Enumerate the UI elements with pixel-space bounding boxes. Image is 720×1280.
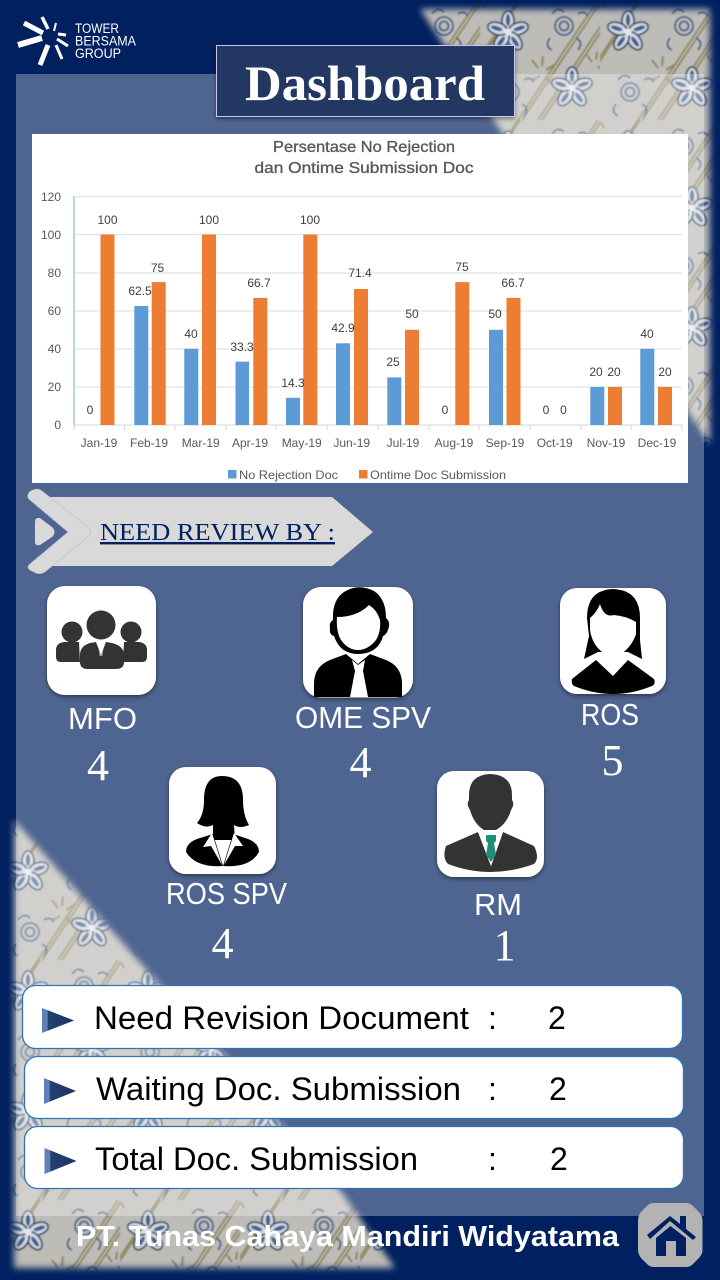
bar chart: Persentase No Rejection dan Ontime Submission Doc: 20 xyxy=(607,365,621,379)
bar chart: Persentase No Rejection dan Ontime Submission Doc: Apr-19 xyxy=(232,436,268,450)
bar chart: Persentase No Rejection dan Ontime Submission Doc: 20 xyxy=(48,380,61,394)
label: RM: RM xyxy=(474,887,522,922)
bar chart: Persentase No Rejection dan Ontime Submission Doc: 62.5 xyxy=(128,284,152,298)
bar chart: Persentase No Rejection dan Ontime Submission Doc: 0 xyxy=(560,403,567,417)
bar chart: Persentase No Rejection dan Ontime Submission Doc: 40 xyxy=(48,342,61,356)
bar chart: Persentase No Rejection dan Ontime Submission Doc: 60 xyxy=(48,304,61,318)
bar chart: Persentase No Rejection dan Ontime Submission Doc: Dec-19 xyxy=(638,436,677,450)
bar chart: Persentase No Rejection dan Ontime Submission Doc: 100 xyxy=(199,213,219,227)
icon card: ROS xyxy=(560,588,666,694)
label: ROS SPV: ROS SPV xyxy=(166,876,287,911)
icon card: OME SPV xyxy=(303,587,413,698)
row: total doc submission xyxy=(24,1126,684,1188)
bar chart: Persentase No Rejection dan Ontime Submission Doc: Ontime Doc Submission xyxy=(370,468,506,482)
count: ROS SPV: 4 xyxy=(212,919,234,968)
row: total doc submission: 2 xyxy=(550,1141,568,1177)
label: MFO: MFO xyxy=(68,701,137,736)
bar chart: Persentase No Rejection dan Ontime Submission Doc: Nov-19 xyxy=(587,436,626,450)
bar chart: Persentase No Rejection dan Ontime Submission Doc: 33.3 xyxy=(230,340,254,354)
row: waiting doc submission: : xyxy=(488,1071,497,1107)
footer: company name: PT. Tunas Cahaya Mandiri Widyatama xyxy=(76,1221,620,1253)
bar chart: Persentase No Rejection dan Ontime Submission Doc: 66.7 xyxy=(247,276,271,290)
count: ROS: 5 xyxy=(602,736,624,785)
bar chart: Persentase No Rejection dan Ontime Submission Doc: Mar-19 xyxy=(182,436,220,450)
bar chart: Persentase No Rejection dan Ontime Submission Doc: Jan-19 xyxy=(81,436,118,450)
bar chart: Persentase No Rejection dan Ontime Submission Doc: 71.4 xyxy=(348,266,372,280)
label: ROS: ROS xyxy=(581,697,639,732)
icon: home button xyxy=(638,1203,702,1267)
bar chart: Persentase No Rejection dan Ontime Submission Doc: 42.9 xyxy=(331,321,355,335)
bar chart: Persentase No Rejection dan Ontime Submission Doc: Feb-19 xyxy=(130,436,168,450)
bar chart: Persentase No Rejection dan Ontime Submission Doc: Jul-19 xyxy=(387,436,420,450)
row: waiting doc submission: 2 xyxy=(549,1071,567,1107)
count: MFO: 4 xyxy=(87,741,109,790)
row: need revision document: 2 xyxy=(548,1000,566,1036)
bar chart: Persentase No Rejection dan Ontime Submission Doc: 0 xyxy=(54,418,61,432)
label: OME SPV: OME SPV xyxy=(295,700,431,735)
bar chart: Persentase No Rejection dan Ontime Submission Doc: 20 xyxy=(658,365,672,379)
title: Dashboard: Dashboard xyxy=(245,55,485,111)
bar chart: Persentase No Rejection dan Ontime Submission Doc: 0 xyxy=(543,403,550,417)
bar chart: Persentase No Rejection dan Ontime Submission Doc: 75 xyxy=(455,260,469,274)
bar chart: Persentase No Rejection dan Ontime Submission Doc: 25 xyxy=(386,355,400,369)
bar chart: Persentase No Rejection dan Ontime Submission Doc: No Rejection Doc xyxy=(239,468,338,482)
bar chart: Persentase No Rejection dan Ontime Submission Doc: 100 xyxy=(300,213,320,227)
logo: Tower Bersama Group: GROUP xyxy=(75,46,121,61)
bar chart: Persentase No Rejection dan Ontime Submission Doc: 100 xyxy=(97,213,118,227)
bar chart: Persentase No Rejection dan Ontime Submission Doc: 40 xyxy=(640,327,654,341)
count: RM: 1 xyxy=(494,921,516,970)
bar chart: Persentase No Rejection dan Ontime Submission Doc: 80 xyxy=(48,266,61,280)
bar chart: Persentase No Rejection dan Ontime Submission Doc: 75 xyxy=(151,261,164,275)
ribbon: need review by: NEED REVIEW BY : xyxy=(100,520,335,546)
row: need revision document: : xyxy=(488,1000,497,1036)
row: need revision document: Need Revision Document xyxy=(94,1000,469,1036)
row: waiting doc submission xyxy=(24,1056,684,1118)
bar chart: Persentase No Rejection dan Ontime Submission Doc: 0 xyxy=(87,403,94,417)
row: need revision document xyxy=(22,986,682,1048)
bar chart: Persentase No Rejection dan Ontime Submission Doc: Aug-19 xyxy=(435,436,474,450)
bar chart: Persentase No Rejection dan Ontime Submission Doc xyxy=(32,134,688,483)
row: total doc submission: Total Doc. Submission xyxy=(95,1141,418,1177)
bar chart: Persentase No Rejection dan Ontime Submission Doc: 14.3 xyxy=(281,376,305,390)
title: Dashboard xyxy=(216,46,514,116)
bar chart: Persentase No Rejection dan Ontime Submission Doc: Oct-19 xyxy=(537,436,573,450)
icon card: ROS SPV xyxy=(169,767,276,874)
bar chart: Persentase No Rejection dan Ontime Submission Doc: May-19 xyxy=(282,436,322,450)
row: total doc submission: : xyxy=(488,1141,497,1177)
bar chart: Persentase No Rejection dan Ontime Submission Doc: Jun-19 xyxy=(333,436,370,450)
bar chart: Persentase No Rejection dan Ontime Submission Doc: 66.7 xyxy=(501,276,525,290)
logo: Tower Bersama Group: BERSAMA xyxy=(75,34,136,48)
bar chart: Persentase No Rejection dan Ontime Submission Doc: 40 xyxy=(184,327,198,341)
bar chart: Persentase No Rejection dan Ontime Submission Doc: Persentase No Rejection xyxy=(273,139,455,156)
bar chart: Persentase No Rejection dan Ontime Submission Doc: 100 xyxy=(41,228,61,242)
row: waiting doc submission: Waiting Doc. Submission xyxy=(96,1071,461,1107)
bar chart: Persentase No Rejection dan Ontime Submission Doc: 20 xyxy=(589,365,603,379)
logo: Tower Bersama Group: TOWER xyxy=(75,21,119,36)
logo: Tower Bersama Group xyxy=(18,17,136,65)
bar chart: Persentase No Rejection dan Ontime Submission Doc: 50 xyxy=(405,307,419,321)
bar chart: Persentase No Rejection dan Ontime Submission Doc: 0 xyxy=(442,403,449,417)
count: OME SPV: 4 xyxy=(350,738,372,787)
bar chart: Persentase No Rejection dan Ontime Submission Doc: 120 xyxy=(41,190,61,204)
bar chart: Persentase No Rejection dan Ontime Submission Doc: 50 xyxy=(488,307,502,321)
icon card: MFO xyxy=(47,586,156,695)
ribbon: need review by xyxy=(28,489,373,574)
bar chart: Persentase No Rejection dan Ontime Submission Doc: Sep-19 xyxy=(486,436,525,450)
icon card: RM xyxy=(437,771,544,877)
bar chart: Persentase No Rejection dan Ontime Submission Doc: dan Ontime Submission Doc xyxy=(254,160,474,177)
